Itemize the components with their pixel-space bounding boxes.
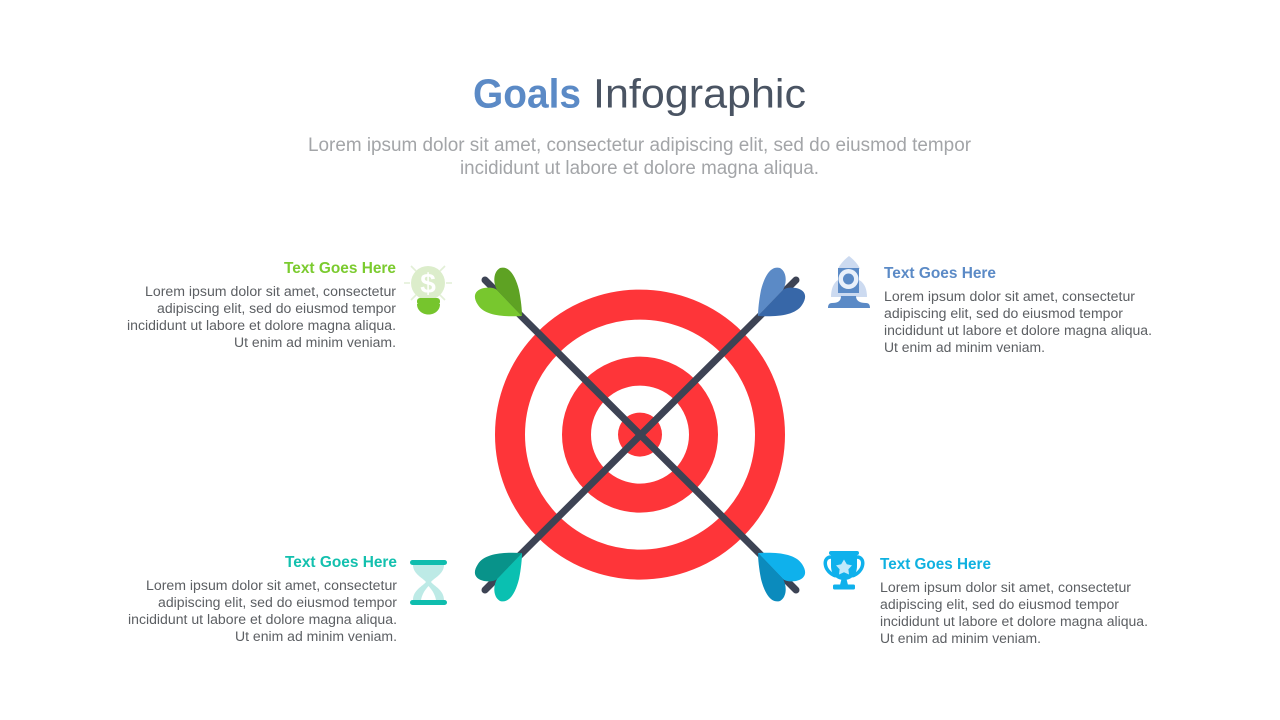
heading and text: bottom right: Text Goes Here — [880, 556, 991, 573]
title: Infographic — [593, 70, 806, 116]
target — [510, 305, 770, 565]
fletching: cyan — [758, 553, 805, 601]
icon: light bulb with dollar — [404, 266, 452, 314]
heading and text: bottom left: incididunt ut labore et dolore magna aliqua. — [128, 612, 397, 627]
heading and text: top right — [884, 265, 1152, 355]
heading and text: bottom right: adipiscing elit, sed do eiusmod tempor — [880, 597, 1120, 612]
arrow: top-left to bottom-right shaft — [485, 280, 796, 590]
subtitle — [308, 135, 972, 179]
heading and text: top left — [127, 260, 397, 350]
heading and text: bottom left — [128, 554, 398, 644]
heading and text: bottom right: incididunt ut labore et dolore magna aliqua. — [880, 614, 1148, 629]
fletching: teal — [475, 553, 522, 601]
heading and text: top right: adipiscing elit, sed do eiusmod tempor — [884, 306, 1124, 321]
icon: trophy — [825, 551, 863, 590]
heading and text: bottom left: Lorem ipsum dolor sit amet, consectetur — [146, 578, 398, 593]
heading and text: bottom right — [880, 556, 1148, 646]
subtitle: incididunt ut labore et dolore magna aliqua. — [460, 158, 819, 179]
title — [473, 70, 806, 116]
heading and text: top left: Text Goes Here — [284, 260, 396, 277]
heading and text: top right: Text Goes Here — [884, 265, 996, 282]
heading and text: top right: Ut enim ad minim veniam. — [884, 340, 1045, 355]
heading and text: top left: incididunt ut labore et dolore magna aliqua. — [127, 318, 396, 333]
heading and text: top right: incididunt ut labore et dolore magna aliqua. — [884, 323, 1152, 338]
title: Goals — [473, 70, 581, 116]
subtitle: Lorem ipsum dolor sit amet, consectetur adipiscing elit, sed do eiusmod tempor — [308, 135, 972, 156]
heading and text: top left: adipiscing elit, sed do eiusmod tempor — [157, 301, 397, 316]
heading and text: bottom right: Ut enim ad minim veniam. — [880, 631, 1041, 646]
fletching: green — [475, 268, 522, 316]
icon: rocket — [828, 256, 870, 308]
fletching: blue — [758, 268, 805, 316]
arrow: top-right to bottom-left shaft — [485, 280, 796, 590]
heading and text: bottom left: adipiscing elit, sed do eiusmod tempor — [158, 595, 398, 610]
heading and text: bottom left: Text Goes Here — [285, 554, 397, 571]
icon: light bulb with dollar: $ — [420, 268, 436, 299]
heading and text: top left: Lorem ipsum dolor sit amet, consectetur — [145, 284, 397, 299]
icon: hourglass — [410, 560, 447, 605]
heading and text: bottom right: Lorem ipsum dolor sit amet, consectetur — [880, 580, 1132, 595]
heading and text: top left: Ut enim ad minim veniam. — [234, 335, 396, 350]
heading and text: bottom left: Ut enim ad minim veniam. — [235, 629, 397, 644]
heading and text: top right: Lorem ipsum dolor sit amet, consectetur — [884, 289, 1136, 304]
